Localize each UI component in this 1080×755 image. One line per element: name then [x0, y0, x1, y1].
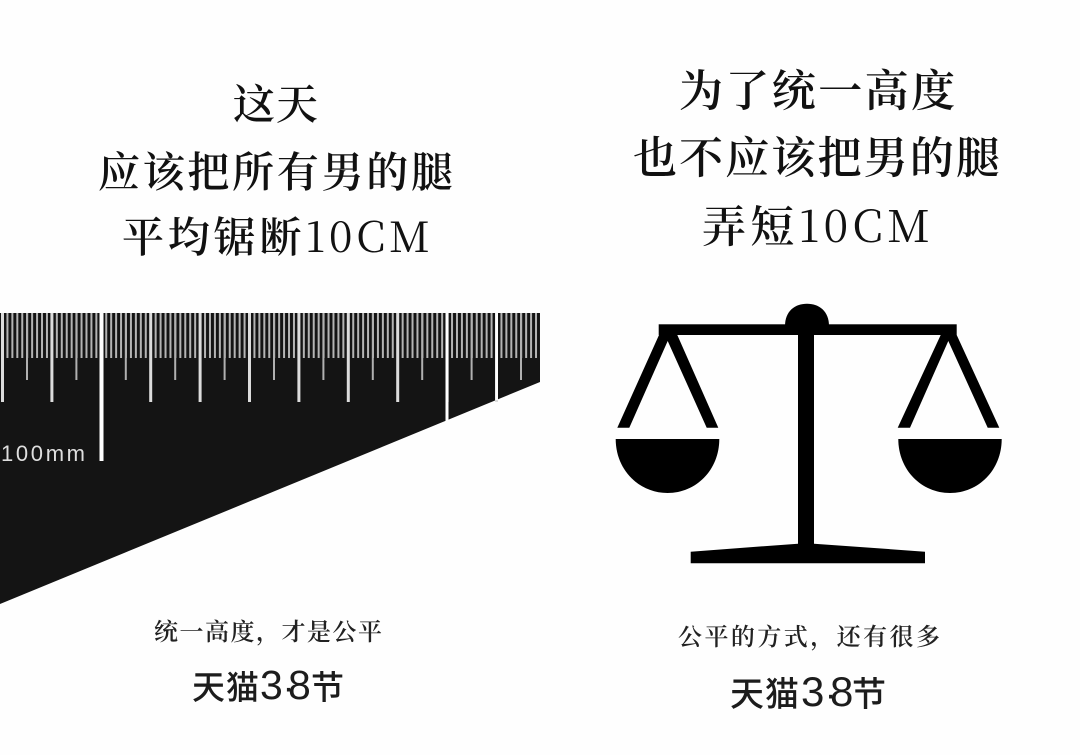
right brand logo: 天	[730, 676, 764, 714]
right title: 为了统一高度	[679, 55, 955, 119]
right slogan: 公平的方式，还有很多	[678, 617, 940, 652]
ruler graphic	[0, 313, 540, 604]
right hanger	[898, 335, 999, 428]
right brand logo: 节	[852, 676, 886, 714]
right title: 弄短10CM	[702, 191, 930, 255]
right panel: scale message	[616, 55, 1002, 715]
left pan	[616, 439, 719, 493]
right title	[633, 55, 1000, 255]
left title: 应该把所有男的腿	[98, 140, 453, 200]
scale beam and knob	[659, 304, 957, 335]
left hanger	[617, 335, 718, 428]
left brand logo: ·	[283, 669, 294, 706]
left brand logo: 天	[192, 669, 225, 706]
right brand logo: 8	[830, 668, 853, 715]
left brand logo: 猫	[226, 669, 259, 706]
left brand logo: 8	[288, 662, 311, 708]
left title	[98, 72, 453, 265]
left slogan: 统一高度，才是公平	[154, 612, 382, 647]
left title: 这天	[233, 72, 318, 132]
right brand logo: ·	[825, 676, 836, 714]
right brand logo: 猫	[765, 676, 799, 714]
right brand logo: 3	[801, 668, 824, 715]
left brand logo: 3	[260, 662, 283, 708]
left panel: ruler message	[0, 72, 540, 708]
left brand logo: 节	[311, 669, 344, 706]
right pan	[898, 439, 1002, 493]
scale column and base	[691, 330, 925, 563]
right title: 也不应该把男的腿	[633, 122, 1000, 186]
left title: 平均锯断10CM	[122, 205, 430, 265]
icon: balance scale	[616, 304, 1002, 563]
ruler label: 100mm	[1, 441, 85, 466]
